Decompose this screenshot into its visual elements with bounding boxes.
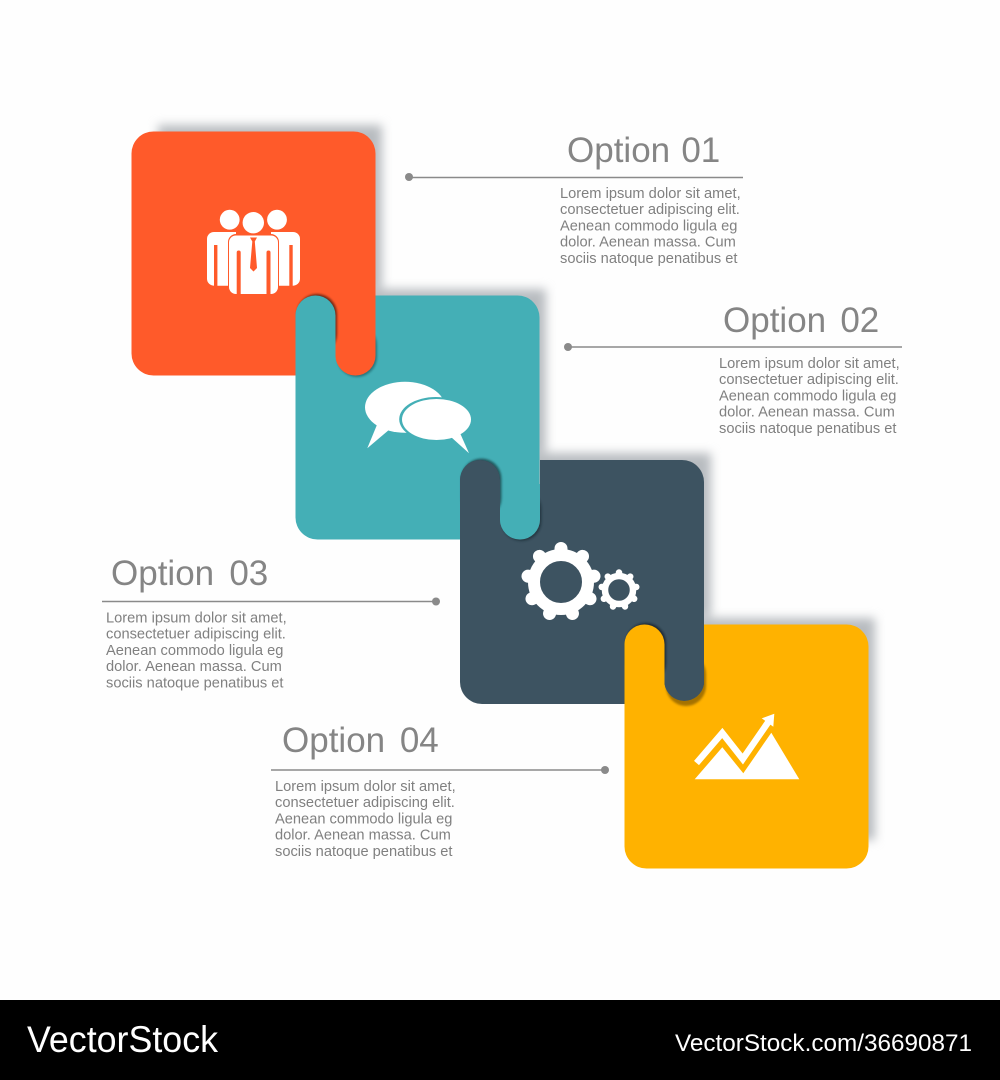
body: option 02: Aenean commodo ligula eg	[719, 388, 896, 404]
heading: option 02: Option 02	[723, 301, 879, 340]
body: option 03: Aenean commodo ligula eg	[106, 643, 283, 659]
body: option 04: Aenean commodo ligula eg	[275, 812, 452, 828]
dark tab shadow on yellow	[666, 654, 706, 706]
text block: option 03	[102, 554, 440, 692]
footer bar	[0, 1000, 1000, 1080]
body: option 01: Aenean commodo ligula eg	[560, 218, 737, 234]
orange tab shadow on teal	[337, 325, 377, 377]
body: option 04: Lorem ipsum dolor sit amet,	[275, 779, 456, 795]
yellow tab shadow on dark	[626, 623, 666, 683]
body: option 02: sociis natoque penatibus et	[719, 421, 896, 437]
icon: gears	[528, 548, 636, 613]
panel: orange square	[132, 132, 376, 376]
panel: dark square	[460, 460, 704, 704]
body: option 04: consectetuer adipiscing elit.	[275, 795, 455, 811]
icon: team of people	[207, 210, 300, 295]
text block: option 04	[271, 721, 609, 860]
orange tab	[336, 320, 376, 376]
teal tab shadow on dark	[502, 489, 542, 541]
yellow tab	[624, 625, 664, 700]
body: option 01: dolor. Aenean massa. Cum	[560, 234, 736, 250]
body: option 01: Lorem ipsum dolor sit amet,	[560, 186, 741, 202]
square shadows	[158, 125, 875, 840]
heading: option 04: Option 04	[282, 721, 439, 760]
icon: growth chart over mountains	[695, 714, 799, 779]
panel: teal square	[296, 296, 540, 540]
panel: yellow square	[624, 624, 868, 868]
body: option 03: Lorem ipsum dolor sit amet,	[106, 610, 287, 626]
leader line: option 03	[102, 598, 440, 606]
body: option 03	[106, 610, 287, 692]
body: option 02: Lorem ipsum dolor sit amet,	[719, 356, 900, 372]
body: option 01	[560, 186, 741, 267]
dark tab	[460, 460, 500, 536]
text block: option 02	[564, 301, 902, 437]
leader line: option 04	[271, 766, 609, 774]
icon: speech bubbles	[365, 382, 472, 453]
body: option 03: dolor. Aenean massa. Cum	[106, 659, 282, 675]
body: option 02: consectetuer adipiscing elit.	[719, 372, 899, 388]
body: option 03: sociis natoque penatibus et	[106, 676, 283, 692]
leader line: option 01	[405, 173, 743, 181]
teal tab shadow on orange	[297, 294, 337, 354]
body: option 04: dolor. Aenean massa. Cum	[275, 828, 451, 844]
body: option 02	[719, 356, 900, 437]
dark tab	[664, 648, 704, 701]
text block: option 01	[405, 131, 743, 267]
body: option 03: consectetuer adipiscing elit.	[106, 626, 286, 642]
teal tab	[500, 484, 540, 540]
teal tab	[296, 296, 336, 372]
dark tab shadow on teal	[462, 458, 502, 518]
body: option 02: dolor. Aenean massa. Cum	[719, 404, 895, 420]
leader line: option 02	[564, 343, 902, 351]
heading: option 01: Option 01	[567, 131, 720, 170]
footer url: VectorStock.com/36690871	[675, 1030, 972, 1057]
body: option 01: sociis natoque penatibus et	[560, 251, 737, 267]
body: option 04	[275, 779, 456, 860]
heading: option 03: Option 03	[111, 554, 268, 593]
footer logo: VectorStock	[27, 1019, 218, 1060]
body: option 01: consectetuer adipiscing elit.	[560, 202, 740, 218]
body: option 04: sociis natoque penatibus et	[275, 844, 452, 860]
